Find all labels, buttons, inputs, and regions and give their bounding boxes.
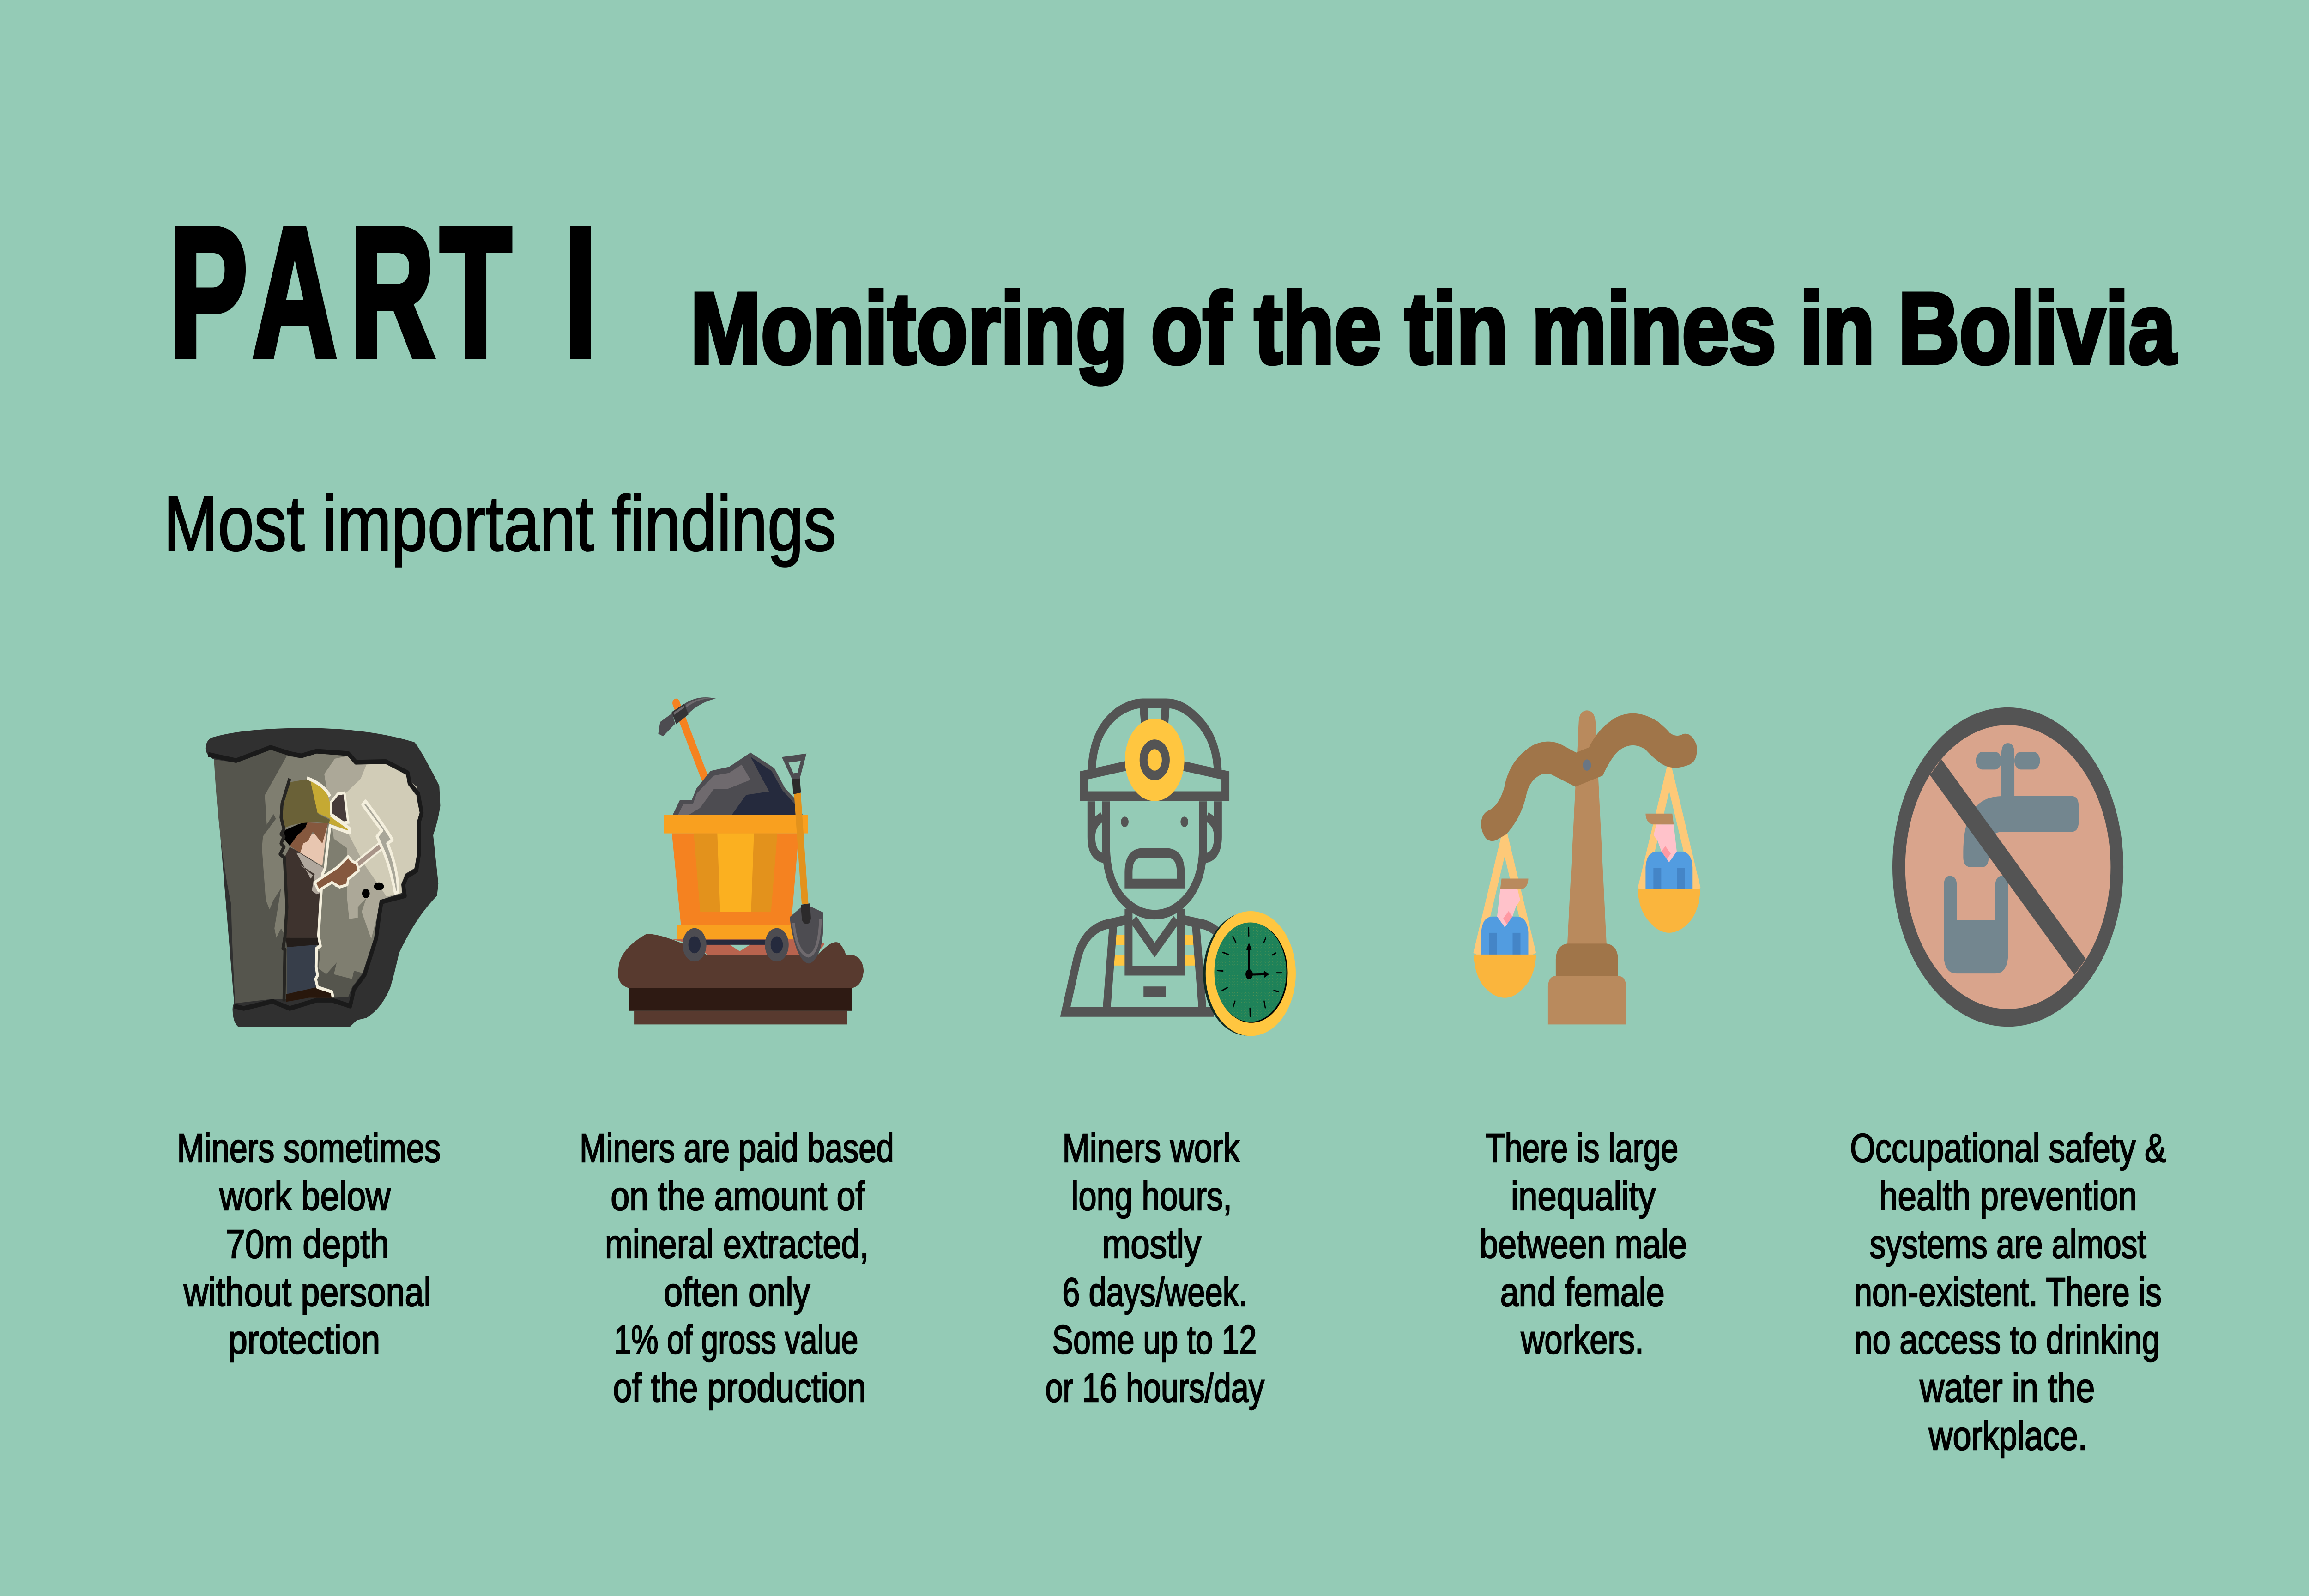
- finding 2 text: [580, 1126, 894, 1410]
- shovel: [782, 754, 823, 963]
- clock hands: [1247, 945, 1268, 977]
- miner dark outline: [280, 779, 290, 1001]
- ground base layer: [634, 1011, 847, 1024]
- finding 1 text: Miners sometimes: [177, 1126, 441, 1171]
- finding 4 text: There is large: [1486, 1126, 1678, 1171]
- finding 5 text: workplace.: [1928, 1414, 2087, 1458]
- finding 5 text: systems are almost: [1870, 1222, 2146, 1267]
- finding 2 text: on the amount of: [610, 1174, 865, 1219]
- falling rocks: [362, 883, 384, 898]
- finding 5 text: Occupational safety &: [1850, 1126, 2166, 1171]
- finding 4 text: workers.: [1521, 1318, 1644, 1362]
- finding 5 text: health prevention: [1879, 1174, 2137, 1219]
- finding 2 text: mineral extracted,: [605, 1222, 869, 1267]
- finding 2 text: often only: [664, 1270, 810, 1315]
- clock ticks: [1217, 928, 1281, 1016]
- finding 1 text: protection: [228, 1318, 380, 1362]
- finding 3 text: Some up to 12: [1052, 1318, 1257, 1362]
- icon: unequal scales: [1474, 710, 1700, 1024]
- faucet: [1963, 743, 2079, 867]
- finding 3 text: [1045, 1126, 1264, 1410]
- prohibition slash: [1936, 767, 2080, 967]
- subtitle: Monitoring of the tin mines in Bolivia: [690, 272, 2176, 385]
- ground dark layer: [629, 988, 852, 1011]
- lamp: [1125, 719, 1185, 801]
- vest stripes: [1114, 935, 1196, 966]
- beam pivot: [1583, 759, 1591, 771]
- helmet lamp: [331, 793, 348, 823]
- jeans: [287, 945, 317, 994]
- helmet bright side: [310, 779, 348, 830]
- icon: no drinking water: [1899, 716, 2117, 1018]
- head: [1091, 801, 1218, 915]
- clock: [1203, 911, 1296, 1036]
- miner body: [280, 778, 350, 1002]
- ore pile: [673, 753, 803, 815]
- icon: ore cart with tools: [618, 697, 864, 1024]
- boot: [286, 987, 332, 1002]
- belt: [286, 938, 320, 947]
- body outline: [1065, 909, 1218, 1012]
- scale beam: [1481, 713, 1697, 841]
- heading: most important findings: Most important findings: [163, 480, 836, 568]
- finding 2 text: Miners are paid based: [580, 1126, 894, 1171]
- finding 5 text: water in the: [1919, 1366, 2095, 1410]
- cave light tone: [324, 756, 417, 939]
- jacket: [284, 847, 324, 938]
- finding 5 text: non-existent. There is: [1854, 1270, 2162, 1315]
- miner light outline: [307, 778, 350, 997]
- scale post: [1567, 710, 1607, 944]
- cave wall: [214, 749, 420, 1003]
- face: [300, 827, 327, 866]
- finding 1 text: 70m depth: [226, 1222, 389, 1267]
- cave lit area: [332, 763, 420, 896]
- finding 3 text: 6 days/week.: [1062, 1270, 1247, 1315]
- cup: [1944, 876, 2008, 973]
- left pan with worker: [1474, 839, 1536, 998]
- finding 1 text: work below: [219, 1174, 391, 1219]
- finding 4 text: between male: [1480, 1222, 1687, 1267]
- finding 3 text: mostly: [1102, 1222, 1201, 1267]
- scale collar: [1556, 943, 1618, 976]
- ground mound: [618, 934, 864, 988]
- hands and arm: [314, 857, 359, 891]
- helmet: [282, 779, 330, 828]
- finding 3 text: long hours,: [1071, 1174, 1232, 1219]
- finding 4 text: inequality: [1511, 1174, 1656, 1219]
- pickaxe head: [363, 801, 398, 893]
- finding 2 text: 1% of gross value: [614, 1318, 858, 1362]
- right pan with worker: [1638, 774, 1700, 933]
- icon: miner outline with clock: [1065, 703, 1296, 1036]
- cave edge shadow: [208, 747, 422, 1009]
- finding 1 text: [177, 1126, 441, 1362]
- pickaxe: [314, 801, 398, 893]
- collar: [296, 853, 324, 894]
- axle: [695, 940, 772, 945]
- icon: miner in tunnel: [206, 728, 440, 1027]
- rails: [672, 939, 825, 955]
- finding 5 text: [1850, 1126, 2166, 1458]
- finding 2 text: of the production: [613, 1366, 866, 1410]
- finding 5 text: no access to drinking: [1854, 1318, 2160, 1362]
- hair and beard shade: [290, 822, 328, 853]
- finding 4 text: [1480, 1126, 1687, 1362]
- helmet: [1084, 703, 1226, 796]
- title: PART I: PART I: [169, 189, 597, 395]
- scale base: [1548, 976, 1626, 1024]
- finding 3 text: or 16 hours/day: [1045, 1366, 1264, 1410]
- notch under cart: [730, 945, 750, 951]
- rock surround: [206, 728, 440, 1027]
- finding 1 text: without personal: [183, 1270, 431, 1315]
- sign disc: [1899, 716, 2117, 1018]
- finding 3 text: Miners work: [1062, 1126, 1240, 1171]
- wheels: [683, 928, 789, 961]
- finding 4 text: and female: [1500, 1270, 1665, 1315]
- pickaxe handle: [334, 844, 384, 883]
- cave mid tone: [262, 754, 417, 979]
- cart body: [664, 815, 808, 940]
- hair: [284, 821, 308, 846]
- pickaxe: [658, 697, 716, 778]
